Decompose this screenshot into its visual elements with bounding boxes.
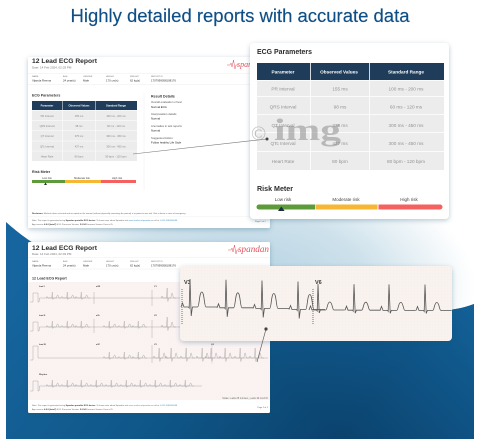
chart: zoomed ECG trace	[181, 279, 452, 318]
icon: spandan logo: spandan	[237, 60, 264, 69]
panel: report page 2 with ECG strips	[28, 242, 270, 413]
title: Highly detailed reports with accurate data	[70, 6, 411, 26]
icon: spandan logo: spandan	[238, 245, 269, 255]
table: ECG parameters small: 60 ms - 120 ms	[107, 124, 126, 128]
scale note and footer: App version: 4.0.0 (beta7) ECG Processor Version: 2.0.34 Firmware Version: Device ID:	[32, 408, 114, 411]
patient details: Vijanda Reema	[32, 264, 52, 268]
patient details: GENDER	[83, 261, 93, 263]
patient details: Male	[83, 264, 90, 268]
table: ECG parameters small: PR Interval	[41, 114, 54, 118]
table: ECG parameters small: Observed Values	[69, 104, 90, 108]
patient details	[32, 260, 176, 268]
result details: Normal ECG	[151, 105, 167, 109]
panel: zoomed ECG parameters card	[250, 43, 449, 219]
strip row 3	[103, 348, 264, 362]
patient details: 24 year(s)	[63, 78, 76, 82]
patient details: AGE	[63, 260, 68, 263]
heading: ECG parameters: ECG Parameters	[32, 94, 60, 98]
chart: ECG strips: lead II	[39, 315, 46, 317]
patient details: WEIGHT	[130, 76, 139, 78]
label: V6: V6	[315, 280, 322, 286]
report heading	[32, 245, 98, 256]
table: ECG parameters small: 437 ms	[75, 144, 84, 148]
table: ECG parameters large: Parameter	[272, 70, 295, 74]
chart: ECG strips: V4	[211, 343, 214, 346]
table: ECG parameters small: QTc Interval	[40, 144, 54, 148]
table: ECG parameters large: Standard Range	[388, 70, 424, 74]
patient details: Vijanda Reema	[32, 78, 52, 82]
risk meter large: Moderate risk	[332, 197, 360, 202]
patient details: HEIGHT	[106, 76, 115, 78]
disclaimer and footer: App version: 4.0.0 (beta7) ECG Processor Version: 2.0.34 Firmware Version: Device ID:	[32, 223, 114, 226]
patient details: 1707999058108176	[151, 78, 176, 82]
connector: table row to zoomed card	[133, 138, 268, 154]
patient details: 62 kg(s)	[130, 78, 140, 82]
risk meter small: Risk Meter	[32, 170, 51, 174]
result details: Interpretation details	[151, 112, 177, 116]
result details: Result Details	[151, 94, 175, 98]
risk meter large	[256, 186, 442, 211]
table: ECG parameters large: PR Interval	[271, 86, 295, 92]
table: ECG parameters large: 300 ms - 450 ms	[389, 123, 424, 128]
patient details: HEIGHT	[106, 261, 115, 263]
patient details: 170 cm(s)	[106, 264, 119, 268]
table: ECG parameters large: Observed Values	[320, 70, 358, 74]
chart: ECG strips: lead I	[39, 286, 45, 288]
patient details: 24 year(s)	[63, 264, 76, 268]
table: ECG parameters large: 375 ms	[332, 123, 348, 128]
table: ECG parameters small: 300 ms - 450 ms	[106, 134, 126, 138]
heading: ECG parameters large: ECG Parameters	[257, 47, 312, 56]
result details: Normal	[151, 116, 160, 120]
watermark: ©	[251, 123, 266, 145]
table: ECG parameters small: 80 bpm - 120 bpm	[105, 154, 127, 158]
report heading: Date: 14 Feb 2024, 02:03 PM	[32, 252, 72, 256]
scale note and footer: Scale: x-axis 25 mm/sec, y-axis 10 mm/mV	[222, 397, 268, 400]
table: ECG parameters small	[32, 101, 137, 161]
patient details: 1707999058108176	[151, 264, 176, 268]
patient details: WEIGHT	[130, 261, 139, 263]
table: ECG parameters small: Heart Rate	[41, 154, 54, 158]
markers: dashed lead separators	[182, 289, 313, 324]
table: ECG parameters large: 60 ms - 120 ms	[390, 105, 423, 110]
result details: Anomalies in test reports	[151, 124, 182, 128]
report heading: 12 Lead ECG Report	[32, 58, 98, 65]
table: ECG parameters large: 80 bpm	[332, 159, 348, 164]
table: ECG parameters large: 437 ms	[332, 141, 348, 146]
table: ECG parameters small: 375 ms	[75, 134, 84, 138]
result details: Normal	[151, 128, 160, 132]
scale note and footer: Page 2 of 2	[257, 407, 269, 409]
table: ECG parameters large: QT Interval	[271, 123, 295, 128]
risk meter small: High risk	[112, 176, 123, 180]
connector: strip to zoomed ECG	[257, 327, 268, 362]
result details: Suggested Action	[151, 136, 173, 140]
report heading: Date: 14 Feb 2024, 02:03 PM	[32, 66, 72, 70]
scale note and footer	[32, 397, 269, 411]
chart: ECG strips: V1	[154, 286, 157, 288]
chart: ECG strips: V3	[154, 344, 157, 346]
patient details: Male	[83, 78, 90, 82]
table: ECG parameters small: 100 ms - 200 ms	[106, 114, 126, 118]
table: ECG parameters small: QT Interval	[41, 134, 54, 138]
table: ECG parameters small: 155 ms	[75, 114, 84, 118]
chart: ECG strips: aVR	[96, 286, 101, 288]
risk meter small: Moderate risk	[74, 176, 91, 180]
heading: strips: 12 Lead ECG Report	[32, 276, 68, 280]
table: ECG parameters small: 300 ms - 450 ms	[106, 144, 126, 148]
disclaimer and footer: Note: This report is generated using Spandan portable ECG device. To know more about Spandan visit www.sunfox.in/spandan or call at 1-415-7080050038	[32, 219, 178, 222]
patient details: 170 cm(s)	[106, 78, 119, 82]
table: ECG parameters large: QTc Interval	[270, 141, 296, 146]
chart: ECG strips: aVF	[96, 344, 101, 346]
patient details: NAME	[32, 75, 39, 78]
disclaimer and footer: Page 1 of 2	[255, 221, 266, 223]
table: ECG parameters small: 80 bpm	[75, 154, 83, 158]
patient details: REPORT ID	[151, 261, 163, 263]
table: ECG parameters large: 155 ms	[332, 86, 348, 92]
label: V3: V3	[184, 280, 191, 286]
panel: report page 1	[28, 57, 270, 228]
watermark	[251, 112, 342, 147]
patient details: REPORT ID	[151, 76, 163, 78]
table: ECG parameters small: Parameter	[41, 104, 53, 108]
report heading	[32, 58, 98, 70]
table: ECG parameters large: 100 ms - 200 ms	[389, 86, 424, 92]
table: ECG parameters large: 98 ms	[334, 105, 347, 110]
watermark: img	[274, 112, 342, 147]
table: ECG parameters large: 300 ms - 450 ms	[389, 141, 424, 146]
background: pale blue glow and blue wave	[6, 170, 474, 439]
patient details: GENDER	[83, 76, 93, 78]
risk meter large: High risk	[400, 197, 418, 202]
table: ECG parameters large: 80 bpm - 120 bpm	[387, 159, 425, 164]
table: ECG parameters small: 98 ms	[75, 124, 83, 128]
result details	[151, 94, 182, 144]
result details: Overall evaluation of test	[151, 100, 182, 104]
patient details	[32, 75, 176, 82]
risk meter small	[32, 170, 136, 185]
panel: zoomed ECG strip card	[180, 266, 452, 341]
chart: ECG strips: lead III	[39, 344, 46, 346]
chart: ECG strips: Rhythm	[39, 373, 47, 376]
table: ECG parameters large	[257, 63, 444, 170]
chart: ECG strips: aVL	[96, 315, 101, 317]
scale note and footer: Note: This report is generated using Spandan portable ECG device. To know more about Spandan visit www.sunfox.in/spandan or call at 1-415-7080050038	[32, 404, 178, 407]
chart: ECG strips: V2	[154, 315, 157, 317]
strip row 1	[46, 288, 176, 302]
disclaimer and footer	[28, 212, 270, 226]
risk meter large: Low risk	[275, 197, 292, 202]
table: ECG parameters large: QRS Interval	[270, 105, 296, 110]
table: ECG parameters small: QRS Interval	[40, 124, 55, 128]
strip row 2	[46, 317, 176, 330]
table: ECG parameters small: Standard Range	[106, 104, 127, 108]
patient details: AGE	[63, 75, 68, 78]
patient details: NAME	[32, 260, 39, 263]
result details: Follow healthy Life Style	[151, 140, 182, 144]
table: ECG parameters large: Heart Rate	[272, 159, 295, 164]
strip rhythm	[46, 380, 194, 388]
chart: ECG strips	[28, 282, 270, 400]
risk meter large: Risk Meter	[257, 186, 293, 193]
risk meter small: Low risk	[42, 176, 52, 180]
patient details: 62 kg(s)	[130, 264, 140, 268]
disclaimer and footer: Disclaimer: Medical advice selected and accepted on the internet (without physically examining the patient) is at patient's own risk. Visit a doctor in case of emergency.	[32, 212, 187, 215]
report heading: 12 Lead ECG Report	[32, 245, 98, 252]
